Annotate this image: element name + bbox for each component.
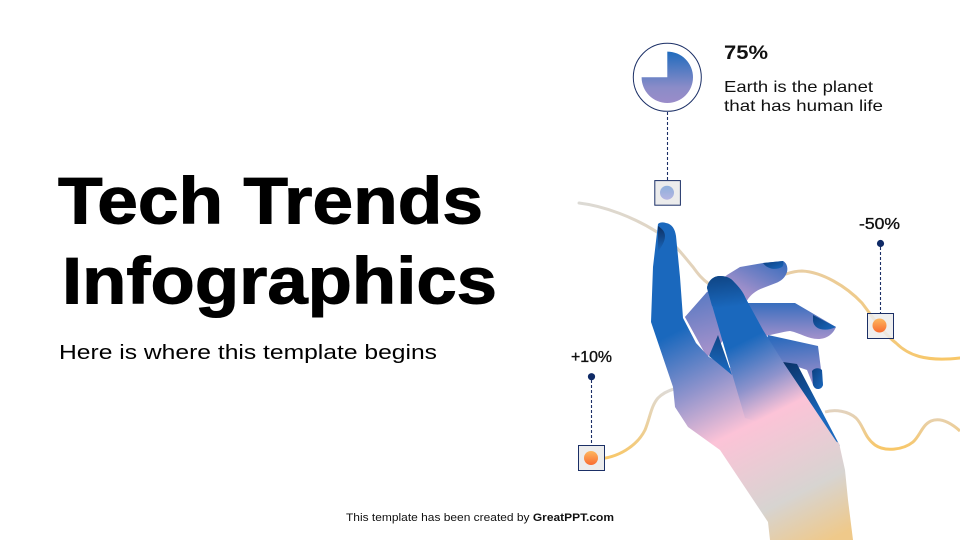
title: Infographics bbox=[62, 244, 497, 318]
back finger: palm side bbox=[685, 290, 728, 357]
pin dot bbox=[877, 240, 884, 247]
marker: plus 10 percent bbox=[571, 349, 612, 470]
back finger: lower bbox=[765, 335, 823, 389]
anchor square bbox=[655, 181, 680, 205]
callout: 75 percent: 75% bbox=[724, 43, 768, 64]
anchor dot bbox=[584, 451, 598, 465]
dark strip beside finger bbox=[783, 362, 840, 446]
curve: lower left line bbox=[597, 389, 674, 459]
back finger: upper bbox=[685, 261, 787, 357]
connector bbox=[666, 112, 668, 180]
callout: 75 percent: Earth is the planet bbox=[724, 79, 874, 96]
subtitle: Here is where this template begins bbox=[59, 342, 437, 364]
fingertip shade: front finger bbox=[707, 276, 747, 309]
hand illustration bbox=[651, 222, 853, 540]
marker: minus 50 percent bbox=[859, 216, 900, 338]
footer credit: This template has been created by GreatPPT.com bbox=[346, 512, 614, 524]
anchor dot bbox=[872, 318, 886, 332]
anchor dot bbox=[660, 186, 674, 200]
pin dot bbox=[588, 373, 595, 380]
callout: 75 percent: that has human life bbox=[724, 98, 883, 115]
label: -50% bbox=[859, 216, 900, 233]
marker: 75 percent pie bbox=[633, 43, 701, 205]
title bbox=[58, 164, 497, 318]
anchor square bbox=[578, 446, 604, 470]
curve: lower right line bbox=[825, 411, 960, 449]
palm and index finger bbox=[651, 222, 853, 540]
title: Tech Trends bbox=[58, 164, 483, 238]
connector bbox=[880, 247, 882, 313]
anchor square bbox=[868, 314, 894, 338]
front finger bbox=[707, 276, 840, 447]
pie ring bbox=[633, 43, 701, 111]
fingertip shade: index finger bbox=[658, 226, 665, 252]
nail: upper finger bbox=[763, 261, 783, 269]
label: +10% bbox=[571, 349, 612, 366]
curve: upper wave line bbox=[579, 203, 960, 359]
back finger: middle bbox=[745, 303, 836, 339]
nail: lower finger bbox=[812, 368, 823, 389]
shadow between fingers bbox=[709, 335, 732, 375]
connector bbox=[590, 380, 592, 445]
callout: 75 percent bbox=[724, 43, 883, 115]
pie slice bbox=[642, 52, 693, 103]
nail: middle finger bbox=[813, 315, 836, 330]
